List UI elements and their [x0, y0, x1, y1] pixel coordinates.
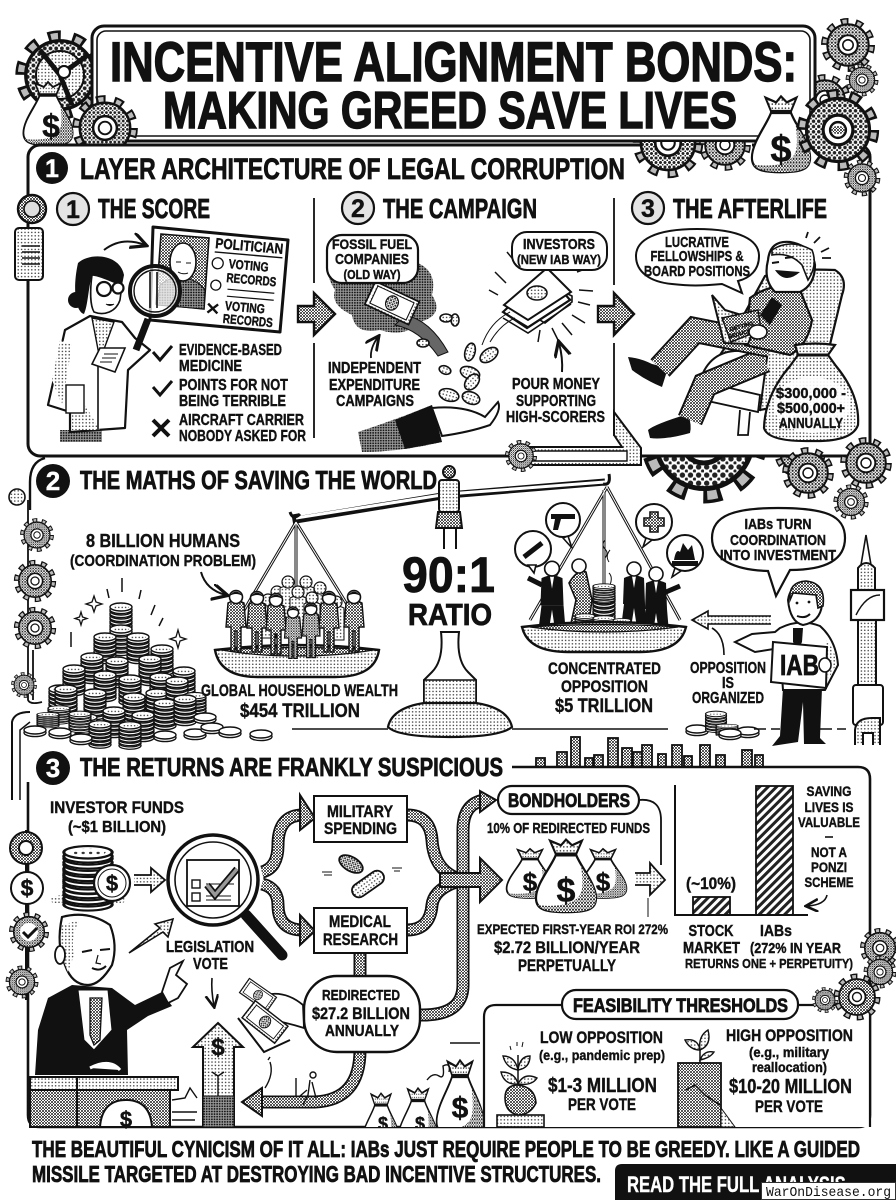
- presenter: [35, 915, 187, 1075]
- bubble: fossil fuel companies: (OLD WAY): [344, 268, 400, 282]
- box: military spending: [314, 796, 407, 842]
- item: evidence-based medicine: MEDICINE: [179, 358, 242, 375]
- money bag: annual pay: [764, 344, 858, 441]
- text: low opposition: $1-3 MILLION: [548, 1075, 657, 1097]
- bubble: redirected: REDIRECTED: [322, 987, 400, 1004]
- left edge icons section 3: [8, 830, 46, 1000]
- scientist with magnifier: [48, 256, 150, 442]
- section number 2: 2: [46, 466, 60, 496]
- arrow: presenter to magnifier: [129, 919, 173, 953]
- bar chart: stock market vs IABs: [675, 785, 853, 971]
- label: independent expenditure campaigns: CAMPAIGNS: [336, 393, 414, 410]
- politician scorecard: POLITICIAN: [215, 236, 284, 258]
- podium: [30, 1077, 178, 1132]
- left gear column: [9, 489, 53, 800]
- box: medical research: [314, 908, 407, 953]
- text: low opposition: LOW OPPOSITION: [540, 1029, 663, 1047]
- item: aircraft carrier: NOBODY ASKED FOR: [179, 428, 306, 445]
- box: military spending: SPENDING: [324, 820, 397, 838]
- ratio callout: 90:1: [402, 547, 495, 603]
- tower with gauge: [851, 535, 884, 745]
- text: low opposition: [539, 1029, 665, 1114]
- money bags: bottom: $: [452, 1092, 469, 1125]
- footer statement: [32, 1136, 860, 1187]
- seated man reading: [628, 232, 831, 438]
- money bag: annual pay: ANNUALLY: [779, 416, 843, 432]
- magnifying glass: [130, 266, 180, 350]
- label: investor funds: [50, 798, 184, 836]
- note: saving lives: SCHEME: [804, 875, 854, 890]
- text: high opposition: $10-20 MILLION: [729, 1076, 852, 1098]
- item: points for not being terrible: BEING TERRIBLE: [179, 393, 286, 410]
- label: pour money: SUPPORTING: [516, 393, 596, 410]
- leader from bondholders to chart arrow: [639, 800, 661, 865]
- label: expected ROI: $2.72 BILLION/YEAR: [494, 938, 640, 957]
- bubble: IABs turn coordination: INTO INVESTMENT: [720, 547, 836, 564]
- sub-panel: the score: [48, 193, 306, 445]
- hand with money: [238, 978, 304, 1052]
- icon: money bag top right: [752, 95, 878, 194]
- icon: check gear: [12, 915, 46, 949]
- note: saving lives: NOT A: [811, 845, 847, 860]
- section number 3: 3: [46, 753, 60, 783]
- label: independent expenditure campaigns: INDEPENDENT: [328, 360, 421, 377]
- upward dollar arrow: [193, 1023, 243, 1127]
- sub-heading: the afterlife: THE AFTERLIFE: [673, 193, 827, 224]
- sub-heading: the campaign: 2: [351, 195, 365, 223]
- seated man reading: SEDUCED: [728, 328, 756, 340]
- pill: feasibility heading: FEASIBILITY THRESHOLDS: [573, 996, 788, 1017]
- label: legislation vote: VOTE: [193, 956, 228, 973]
- bar chart: stock market vs IABs: (~10%): [686, 875, 736, 893]
- small coins: [686, 711, 846, 740]
- bubble: fossil fuel companies: [327, 235, 418, 283]
- money bags: bottom: $: [378, 1114, 388, 1134]
- bubble: investors: INVESTORS: [523, 237, 595, 253]
- label: concentrated opposition: OPPOSITION: [561, 677, 648, 696]
- bubble: fellowships: [636, 229, 759, 293]
- note: saving lives: [798, 784, 860, 906]
- money stack: investors: [482, 252, 593, 345]
- label: 8 billion humans: (COORDINATION PROBLEM): [70, 553, 256, 570]
- icon: plant from money bag: [497, 1042, 544, 1127]
- icon: gear and money bag top left: $: [42, 108, 60, 144]
- politician scorecard: VOTING: [224, 298, 266, 316]
- bar chart: stock market vs IABs: STOCK: [688, 923, 734, 940]
- label: concentrated opposition: CONCENTRATED: [548, 659, 661, 678]
- armchair: [694, 270, 844, 435]
- sub-panel: feasibility thresholds: [484, 990, 870, 1127]
- box: medical research: MEDICAL: [329, 913, 391, 931]
- note: saving lives: LIVES IS: [804, 800, 854, 815]
- sign: IAB: IAB: [780, 650, 819, 682]
- label: opposition is organized: ORGANIZED: [692, 690, 764, 707]
- label: independent expenditure campaigns: [328, 360, 421, 410]
- label: expected ROI: [477, 921, 668, 975]
- bar chart: stock market vs IABs: (272% IN YEAR: [750, 941, 841, 957]
- sub-heading: the score: 1: [66, 196, 80, 224]
- panel: layer architecture: [28, 145, 870, 456]
- label: concentrated opposition: $5 TRILLION: [555, 696, 653, 717]
- bar chart: stock market vs IABs: RETURNS ONE + PERPETUITY): [685, 956, 853, 971]
- text: high opposition: HIGH OPPOSITION: [726, 1027, 853, 1045]
- sub-heading: the score: [57, 193, 210, 225]
- label: legislation vote: LEGISLATION: [166, 939, 254, 956]
- arrow: campaign to afterlife: [598, 293, 634, 335]
- title banner: [92, 26, 815, 141]
- seated man reading: GETTING: [729, 321, 754, 333]
- text: low opposition: PER VOTE: [568, 1096, 636, 1114]
- arrowheads on flow tubes: [242, 791, 502, 1116]
- bubble: redirected: $27.2 BILLION: [312, 1004, 410, 1023]
- arrow: IAB to opposition: [692, 611, 771, 629]
- label: global household wealth: GLOBAL HOUSEHOLD WEALTH: [201, 681, 398, 700]
- money bag: annual pay: $500,000+: [777, 401, 845, 417]
- sub-heading: the campaign: [342, 192, 537, 224]
- falling coins: [417, 314, 501, 407]
- arrow: bags to chart: [635, 863, 665, 895]
- label: pour money: POUR MONEY: [512, 376, 601, 393]
- right pan with opposition: [515, 487, 703, 652]
- politician scorecard: [150, 227, 288, 332]
- balance scale: beam and column: [290, 466, 668, 737]
- ratio callout: [402, 547, 495, 632]
- text: low opposition: (e.g., pandemic prep): [539, 1047, 665, 1063]
- label: opposition is organized: IS: [722, 675, 734, 692]
- pill: bondholders: [498, 786, 639, 814]
- label: opposition is organized: OPPOSITION: [690, 660, 766, 677]
- label: opposition is organized: [690, 660, 766, 707]
- section number 1: [36, 152, 68, 184]
- section number 1: 1: [45, 155, 59, 183]
- note: saving lives: PONZI: [811, 860, 847, 875]
- label: pour money: HIGH-SCORERS: [506, 409, 605, 426]
- panel: returns are frankly suspicious: [28, 751, 870, 1150]
- icon: coin stack: $: [106, 871, 118, 896]
- bubble: fellowships: FELLOWSHIPS &: [650, 249, 744, 265]
- box: medical research: RESEARCH: [323, 931, 398, 949]
- money bags: bottom: $: [415, 1114, 425, 1134]
- label: expected ROI: EXPECTED FIRST-YEAR ROI 272%: [477, 921, 668, 937]
- item: aircraft carrier: AIRCRAFT CARRIER: [179, 412, 304, 429]
- heading: layer architecture: LAYER ARCHITECTURE OF LEGAL CORRUPTION: [80, 153, 625, 186]
- man holding IAB sign: [735, 581, 838, 746]
- arrow: up to cloud: [371, 337, 378, 358]
- flow tubes: [262, 800, 485, 1102]
- gears overlapping top of panel 1: [632, 142, 752, 178]
- bags: bondholder returns: $: [523, 867, 538, 897]
- smoke cloud with bill: [328, 251, 448, 356]
- arrow: score to campaign: [298, 293, 335, 335]
- sign: IAB: [771, 642, 827, 688]
- item: aircraft carrier: [153, 412, 306, 445]
- label: 8 billion humans: 8 BILLION HUMANS: [86, 531, 240, 551]
- heading: the returns: THE RETURNS ARE FRANKLY SUSPICIOUS: [80, 752, 503, 782]
- pill: feasibility heading: [562, 990, 798, 1019]
- bubble: IABs turn coordination: IABs TURN: [744, 516, 812, 533]
- sub-panel: the afterlife: [628, 192, 858, 441]
- arrow to left pan: [201, 572, 226, 595]
- button: read the full analysis: [615, 1164, 896, 1200]
- footer statement: MISSILE TARGETED AT DESTROYING BAD INCENTIVE STRUCTURES.: [32, 1161, 601, 1187]
- heading: the maths: THE MATHS OF SAVING THE WORLD: [80, 465, 437, 495]
- label: 10 percent: 10% OF REDIRECTED FUNDS: [487, 821, 650, 837]
- label: investor funds: (~$1 BILLION): [68, 819, 166, 836]
- icon: dollar coin: $: [21, 875, 34, 901]
- arrow: up to money: [559, 343, 562, 372]
- bags: bondholder returns: $: [596, 867, 611, 897]
- item: evidence-based medicine: EVIDENCE-BASED: [179, 342, 282, 359]
- section number 2: [36, 464, 70, 498]
- icon: pills: [322, 851, 402, 900]
- bags: bondholder returns: $: [557, 872, 576, 910]
- podium: $: [120, 1107, 132, 1132]
- icon: knob and tag on left edge: [15, 195, 46, 280]
- politician scorecard: RECORDS: [226, 270, 277, 289]
- text: high opposition: (e.g., military: [749, 1044, 829, 1060]
- bubble: fossil fuel companies: COMPANIES: [335, 252, 409, 268]
- ratio callout: RATIO: [408, 597, 492, 632]
- text: high opposition: reallocation): [752, 1059, 827, 1075]
- label: expected ROI: PERPETUALLY: [518, 956, 617, 975]
- money bag: annual pay: $300,000 -: [776, 386, 846, 402]
- small sketch: mountain and figure: [172, 1057, 316, 1120]
- sub-heading: the afterlife: [632, 192, 827, 224]
- money bags: bottom: [364, 1042, 483, 1127]
- text: high opposition: [726, 1027, 853, 1116]
- sub-panel: the campaign: [327, 192, 607, 452]
- item: evidence-based medicine: [153, 342, 282, 375]
- section number 3: [36, 751, 70, 785]
- bubble: IABs turn coordination: COORDINATION: [730, 532, 826, 549]
- bar silhouette between sections: [536, 737, 763, 767]
- label: pour money: [506, 376, 605, 426]
- label: global household wealth: [201, 681, 398, 722]
- sub-heading: the score: THE SCORE: [98, 193, 210, 224]
- icon bubbles: industries: [515, 503, 703, 577]
- bubble: fossil fuel companies: FOSSIL FUEL: [332, 237, 412, 252]
- sub-heading: the campaign: THE CAMPAIGN: [383, 193, 537, 224]
- pill: bondholders: BONDHOLDERS: [508, 791, 630, 812]
- box: military spending: MILITARY: [327, 803, 393, 821]
- bar chart: stock market vs IABs: MARKET: [683, 940, 740, 957]
- bubble: redirected: ANNUALLY: [325, 1023, 400, 1040]
- arrow: vote down: [212, 978, 214, 1006]
- bubble: investors: [512, 232, 607, 270]
- label: investor funds: INVESTOR FUNDS: [50, 798, 184, 817]
- note: saving lives: SAVING: [806, 784, 852, 799]
- icon: money bag top right: $: [770, 129, 792, 171]
- title text line 2: MAKING GREED SAVE LIVES: [163, 82, 737, 140]
- bubble: IABs turn coordination: [712, 508, 845, 596]
- checklist: [153, 342, 306, 445]
- item: points for not being terrible: [153, 377, 288, 410]
- icon: coin stack: [50, 846, 130, 911]
- hand with black sleeve: [358, 402, 499, 452]
- label: concentrated opposition: [548, 659, 661, 717]
- label: global household wealth: $454 TRILLION: [240, 701, 360, 722]
- icon: plant from concrete: [678, 1030, 735, 1127]
- label: legislation vote: [166, 939, 254, 973]
- panel: maths of saving the world: [9, 458, 884, 800]
- curved leader: [712, 628, 724, 655]
- label: independent expenditure campaigns: EXPENDITURE: [329, 377, 420, 394]
- gears on right edge: [814, 931, 896, 1017]
- bar chart: stock market vs IABs: IABs: [760, 923, 792, 940]
- bags: bondholder returns: [507, 840, 626, 912]
- upward dollar arrow: $: [211, 1034, 225, 1061]
- bubble: redirected: [304, 976, 420, 1052]
- label: 8 billion humans: [70, 531, 256, 570]
- bubble: fellowships: BOARD POSITIONS: [644, 264, 750, 280]
- bubble: investors: (NEW IAB WAY): [517, 252, 601, 267]
- sub-heading: the afterlife: 3: [641, 195, 655, 223]
- magnifier with ballot: [168, 835, 282, 955]
- note: saving lives: VALUABLE: [798, 815, 860, 830]
- bubble: fellowships: LUCRATIVE: [665, 235, 729, 251]
- text: high opposition: PER VOTE: [755, 1098, 823, 1116]
- coin pile: [24, 578, 272, 749]
- item: points for not being terrible: POINTS FOR NOT: [179, 377, 288, 394]
- background gears: upper left and right: [22, 22, 876, 494]
- left pan with people: [215, 522, 379, 677]
- politician scorecard: VOTING: [228, 256, 269, 275]
- icon: gear and money bag top left: [23, 82, 133, 156]
- arrow: funds to vote: [134, 868, 165, 892]
- icon: dollar coin: [11, 872, 43, 904]
- arrow: scientist to card: [104, 241, 145, 250]
- mechanism at section divider: [507, 412, 888, 517]
- politician scorecard: RECORDS: [222, 311, 274, 330]
- icon: gear coin: [10, 832, 42, 864]
